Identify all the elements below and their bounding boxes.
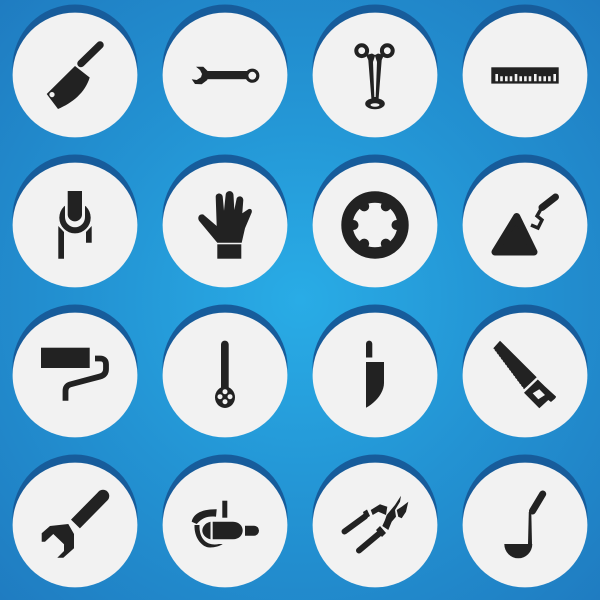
icon: hand saw	[462, 304, 588, 437]
icon: trowel	[462, 154, 588, 287]
icon: ladle	[462, 454, 588, 587]
icon: pliers	[312, 454, 438, 587]
icon: open-end wrench	[12, 454, 138, 587]
icon: cleaver	[12, 4, 138, 137]
icon: spanner	[162, 4, 288, 137]
icon: surgical scissors	[312, 4, 438, 137]
icon: pulley	[12, 154, 138, 287]
icon: ruler	[462, 4, 588, 137]
icon: knife	[312, 304, 438, 437]
icon: gear ring	[312, 154, 438, 287]
icon: glove	[162, 154, 288, 287]
icon: paint roller	[12, 304, 138, 437]
icon: slotted spoon	[162, 304, 288, 437]
icon: angle grinder	[162, 454, 288, 587]
